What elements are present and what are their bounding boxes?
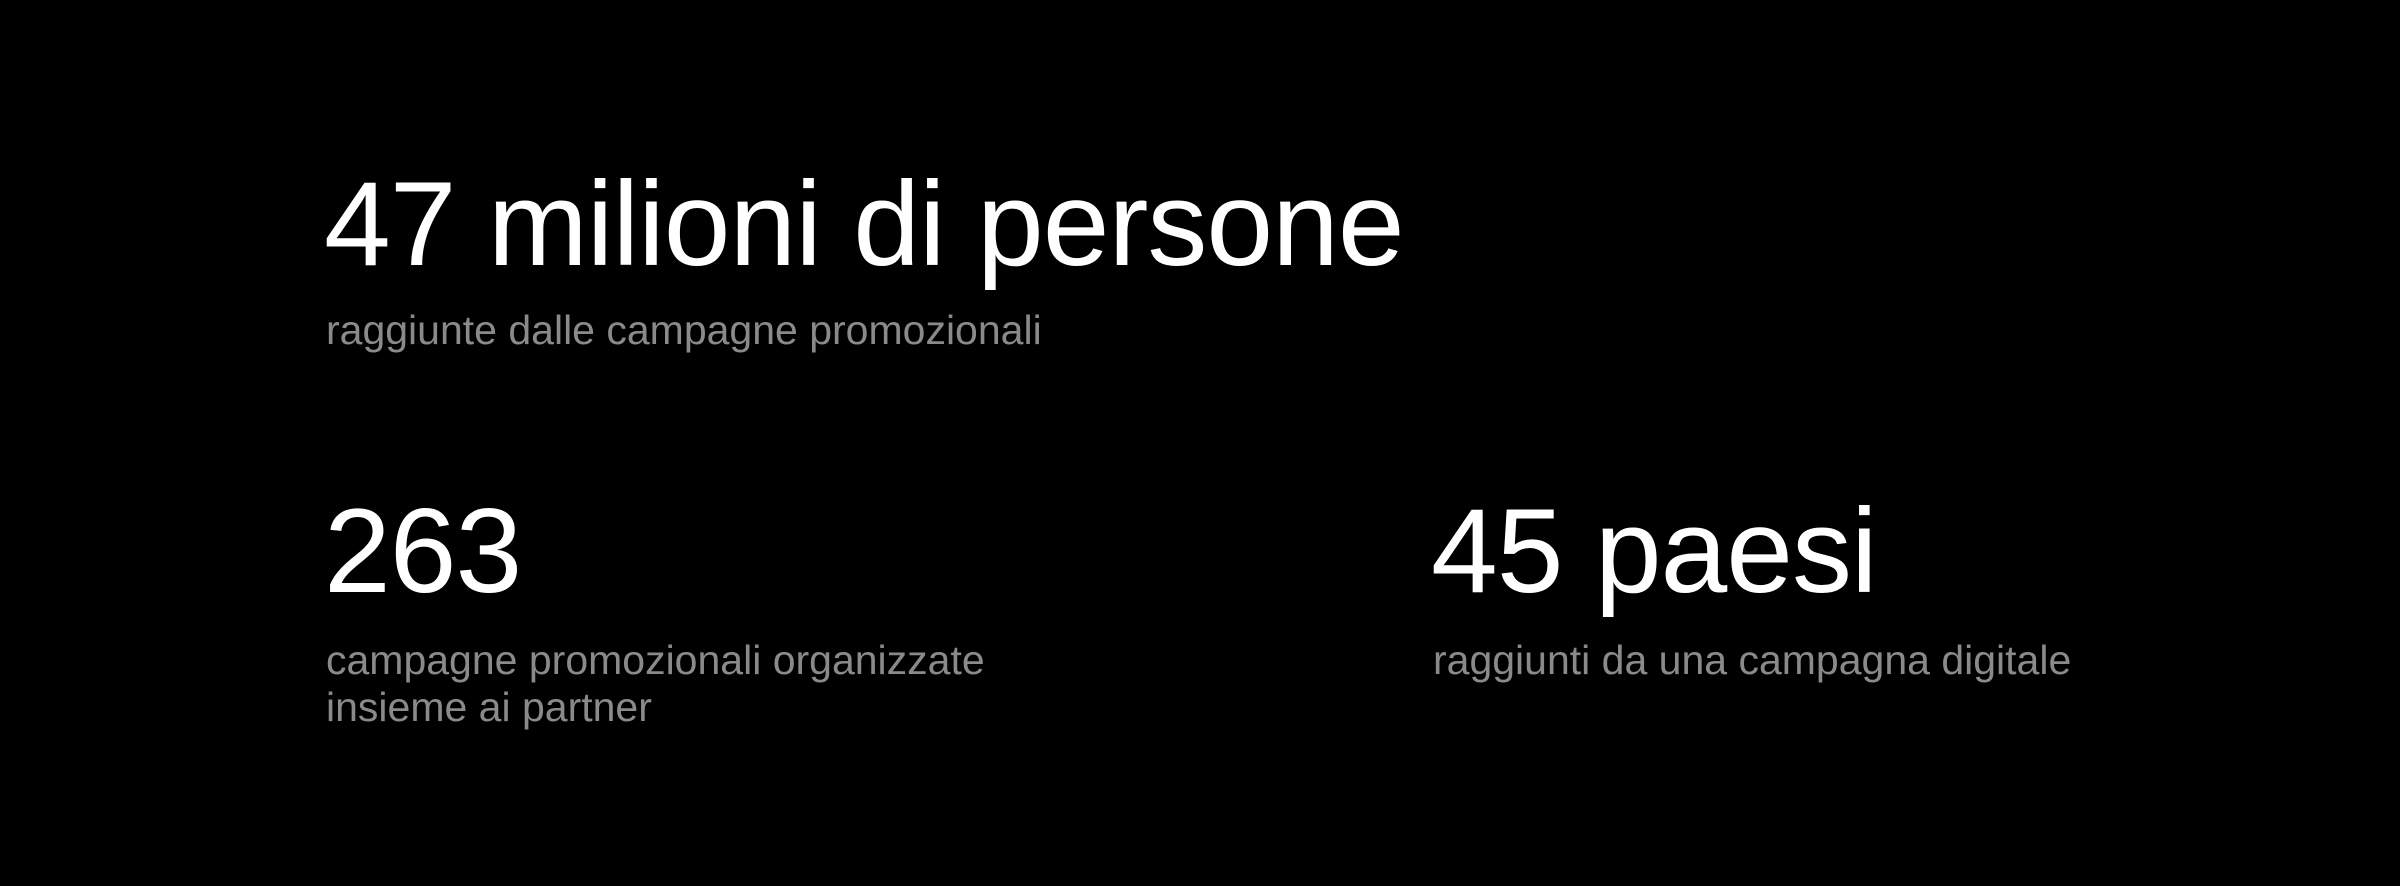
text: raggiunte dalle campagne promozionali: raggiunte dalle campagne promozionali: [326, 307, 1042, 353]
stat block: 47 milioni di persone: [324, 157, 1404, 353]
heading: 47 milioni di persone: 47 milioni di persone: [324, 157, 1404, 291]
text: raggiunti da una campagna digitale: raggiunti da una campagna digitale: [1433, 637, 2071, 683]
stat block: 263: [324, 484, 985, 730]
text: campagne promozionali organizzate insieme ai partner: [326, 637, 985, 730]
stat block: 45 paesi: [1431, 484, 2071, 683]
heading: 45 paesi: 45 paesi: [1431, 484, 1877, 618]
heading: 263: 263: [324, 484, 521, 618]
text: campagne promozionali organizzate insieme ai partner: insieme ai partner: [326, 684, 652, 730]
text: campagne promozionali organizzate insieme ai partner: campagne promozionali organizzate: [326, 637, 985, 683]
